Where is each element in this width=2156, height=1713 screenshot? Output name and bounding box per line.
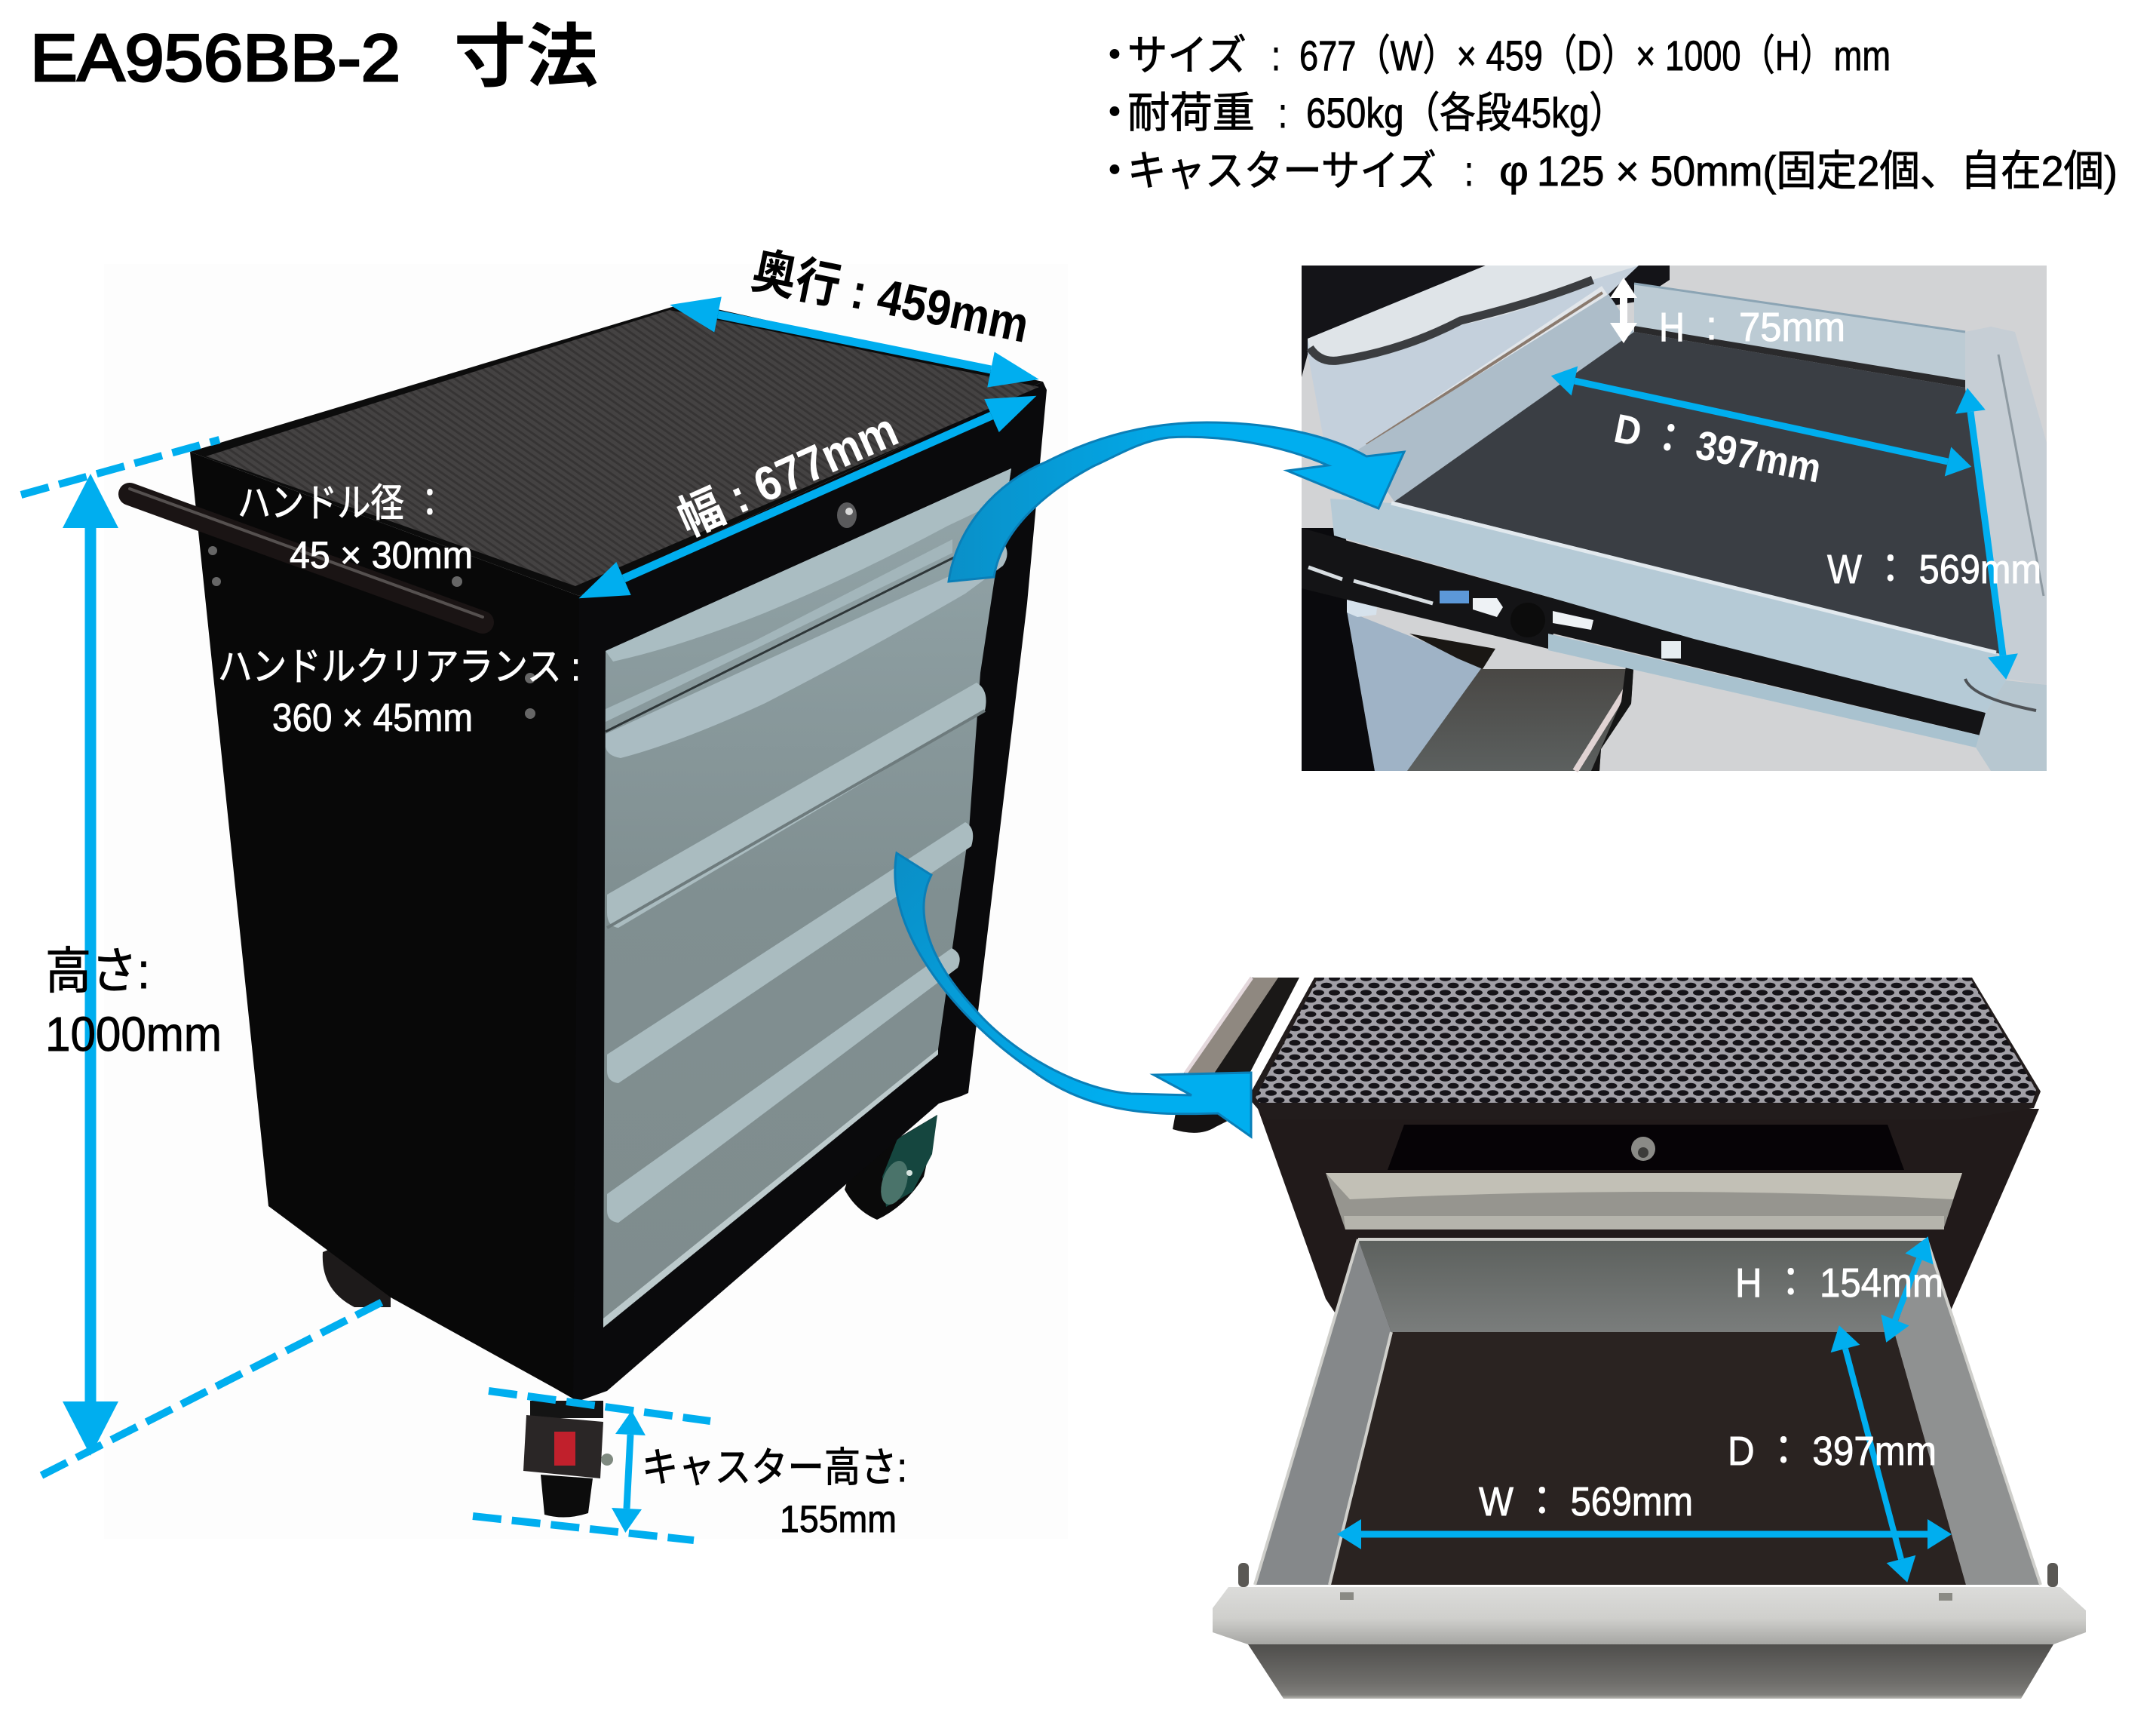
label: handle diameter: ハンドル径 ： bbox=[238, 482, 446, 526]
arrow: height bbox=[84, 528, 97, 1401]
cabinet side panel bbox=[190, 452, 581, 1403]
arrow: depth bbox=[718, 315, 991, 370]
icon: side handle bar bbox=[130, 489, 483, 622]
label: handle clearance: 360 × 45mm bbox=[272, 696, 473, 740]
icon: lock bbox=[1631, 1137, 1655, 1161]
black cabinet body bbox=[1258, 1109, 2039, 1335]
drawer corner bracket bbox=[1976, 680, 2047, 771]
label: top drawer depth: D ： 397mm bbox=[1611, 406, 1825, 492]
panel: open drawer photo bottom right bbox=[1173, 978, 2086, 1699]
label: width: 幅 : 677mm bbox=[670, 402, 906, 547]
label: height bbox=[45, 943, 222, 1061]
arrow: open drawer width bbox=[1361, 1531, 1928, 1537]
upper closed drawer bbox=[1326, 1173, 1962, 1229]
label: handle clearance: ハンドルクリアランス : bbox=[218, 646, 581, 689]
arrow: caster height bbox=[627, 1435, 630, 1509]
label: top drawer height: : bbox=[1706, 303, 1717, 348]
label: top drawer width: W ： 569mm bbox=[1827, 547, 2041, 592]
label: height: 高さ: bbox=[45, 943, 150, 999]
drawer floor bbox=[1329, 1332, 1966, 1585]
specification list: キャスターサイズ bbox=[1127, 147, 1437, 195]
side screws bbox=[208, 546, 535, 719]
drawer front face bbox=[1248, 1644, 2053, 1699]
drawer front rim bbox=[1213, 1587, 2086, 1644]
label: height: 1000mm bbox=[45, 1007, 222, 1061]
specification list: ・ bbox=[1093, 147, 1136, 195]
drawer front wall bbox=[1330, 499, 2006, 713]
drawer left wall bbox=[1255, 1239, 1391, 1585]
label: open drawer width: W ： 569mm bbox=[1479, 1479, 1693, 1524]
arrow: top drawer height bbox=[1620, 298, 1627, 323]
rubber top mat bbox=[206, 310, 1039, 586]
label: caster height: 155mm bbox=[780, 1498, 897, 1540]
label: open drawer depth: D ： 397mm bbox=[1728, 1429, 1937, 1474]
drawer right rim bbox=[1965, 327, 2047, 685]
curved arrow to top drawer bbox=[949, 422, 1404, 582]
specification list: φ bbox=[1499, 147, 1529, 195]
title: EA956BB-2 bbox=[30, 20, 400, 95]
label: top drawer height: 75mm bbox=[1739, 305, 1845, 350]
dashed reference lines bbox=[21, 440, 710, 1540]
label: handle diameter: 45 × 30mm bbox=[290, 534, 473, 576]
specification list: サイズ bbox=[1127, 32, 1247, 79]
drawer posts bbox=[1238, 1563, 2058, 1587]
panel: cabinet photo bbox=[104, 264, 1068, 1539]
panel: drawer photo top right bbox=[1302, 266, 2047, 771]
dark recess bbox=[1388, 1125, 1904, 1170]
rim tabs bbox=[1340, 1592, 1952, 1601]
hex top mat bbox=[1248, 978, 2041, 1119]
icon: chrome handle bbox=[1173, 978, 1299, 1133]
slide rail bbox=[1302, 528, 1986, 748]
title: 寸法 bbox=[454, 19, 598, 96]
arrow: open drawer depth bbox=[1845, 1349, 1901, 1559]
specification list: 125 × 50mm(固定2個、自在2個) bbox=[1537, 147, 2118, 195]
label: handle clearance bbox=[218, 646, 581, 740]
drawer fronts bbox=[603, 468, 1011, 1328]
drawer floor mat bbox=[1394, 332, 2001, 654]
drawer back wall bbox=[1358, 1239, 1927, 1332]
specification list: : bbox=[1464, 147, 1474, 195]
specification list: 650kg（各段45kg） bbox=[1306, 89, 1625, 137]
specification list: ・ bbox=[1093, 32, 1136, 79]
drawer handle front bbox=[1308, 266, 1639, 491]
drawer right wall bbox=[1894, 1239, 2041, 1585]
label: open drawer height: H ： 154mm bbox=[1735, 1260, 1943, 1306]
cabinet front frame bbox=[573, 382, 1047, 1403]
specification list: 耐荷重 bbox=[1127, 89, 1255, 137]
drawer back wall bbox=[1634, 284, 1965, 388]
arrow: top drawer width bbox=[1970, 412, 2003, 655]
cabinet top edge bbox=[190, 302, 1043, 596]
title bbox=[30, 19, 598, 96]
label: depth: 奥行 : 459mm bbox=[747, 242, 1033, 353]
label: caster height: キャスター高さ: bbox=[642, 1445, 907, 1490]
label: top drawer height bbox=[1659, 303, 1845, 350]
label: top drawer height: H bbox=[1659, 305, 1685, 350]
curved arrow to open drawer bbox=[895, 853, 1251, 1137]
icon: rear caster bbox=[323, 1247, 391, 1307]
icon: front caster bbox=[523, 1401, 613, 1518]
specification list: : bbox=[1278, 89, 1287, 137]
left black column bbox=[1302, 528, 1375, 771]
icon: green rear caster bbox=[845, 1115, 937, 1220]
arrow: width bbox=[624, 416, 992, 579]
label: handle diameter bbox=[238, 482, 473, 576]
icon: lock bbox=[837, 502, 857, 528]
label: caster height bbox=[642, 1445, 907, 1540]
specification list: : bbox=[1271, 32, 1280, 79]
specification list bbox=[1093, 32, 2118, 195]
drawer left wall bbox=[1358, 294, 1634, 502]
arrow: open drawer height bbox=[1895, 1259, 1919, 1320]
specification list: 677（W）× 459（D）× 1000（H）mm bbox=[1299, 32, 1891, 79]
lower drawer bbox=[1347, 596, 1633, 771]
specification list: ・ bbox=[1093, 89, 1136, 137]
arrow: top drawer depth bbox=[1575, 381, 1948, 462]
